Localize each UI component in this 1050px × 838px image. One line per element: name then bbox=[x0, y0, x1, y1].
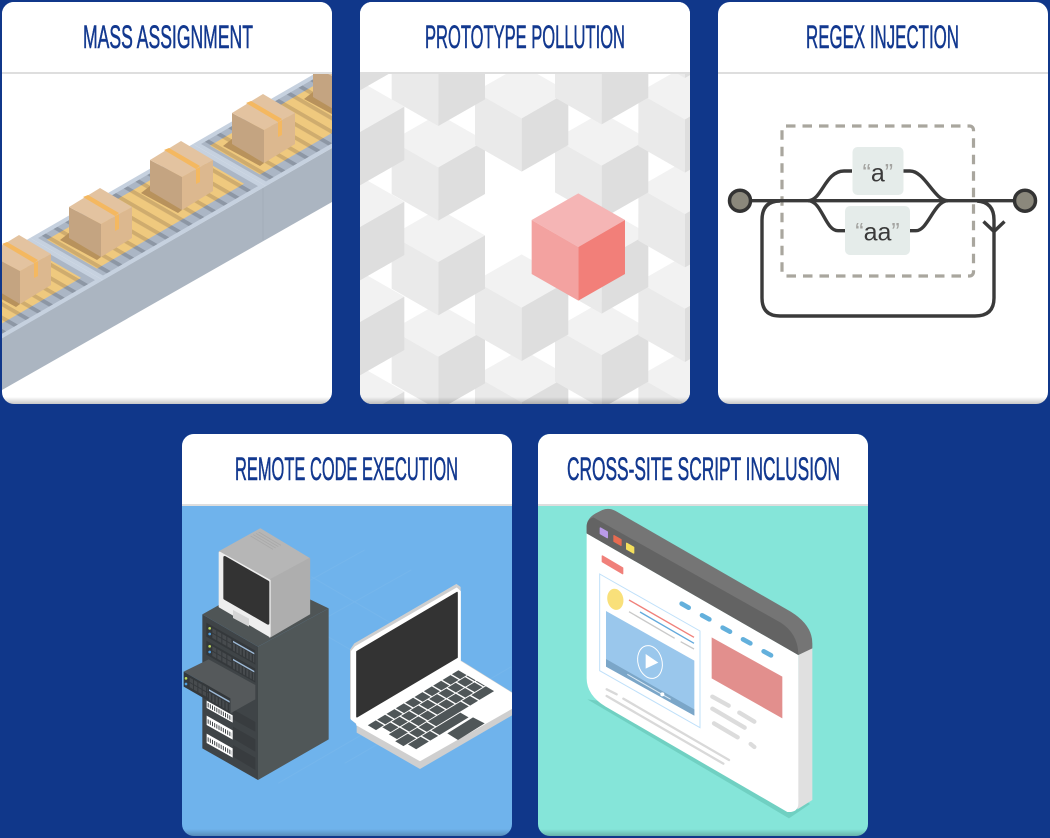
panel: mass assignment bbox=[2, 2, 332, 404]
panel: cross-site script inclusion bbox=[538, 434, 868, 836]
heading: prototype pollution: PROTOTYPE POLLUTION bbox=[425, 19, 625, 55]
diagram: regex railroad: “aa” bbox=[855, 218, 900, 246]
diagram: regex railroad: “a” bbox=[863, 160, 893, 188]
panel: prototype pollution bbox=[360, 2, 690, 404]
illustration: browser window bbox=[587, 509, 812, 818]
heading: remote code execution: REMOTE CODE EXECUTION bbox=[235, 451, 458, 487]
panel: regex injection bbox=[718, 2, 1048, 404]
heading: mass assignment: MASS ASSIGNMENT bbox=[83, 19, 253, 55]
diagram: regex railroad bbox=[730, 126, 1036, 316]
illustration: server rack, monitor and laptop bbox=[184, 529, 513, 783]
illustration: conveyor belt with boxes bbox=[2, 74, 332, 390]
illustration: isometric cubes with one red cube bbox=[311, 0, 732, 472]
panel: remote code execution bbox=[182, 434, 513, 836]
